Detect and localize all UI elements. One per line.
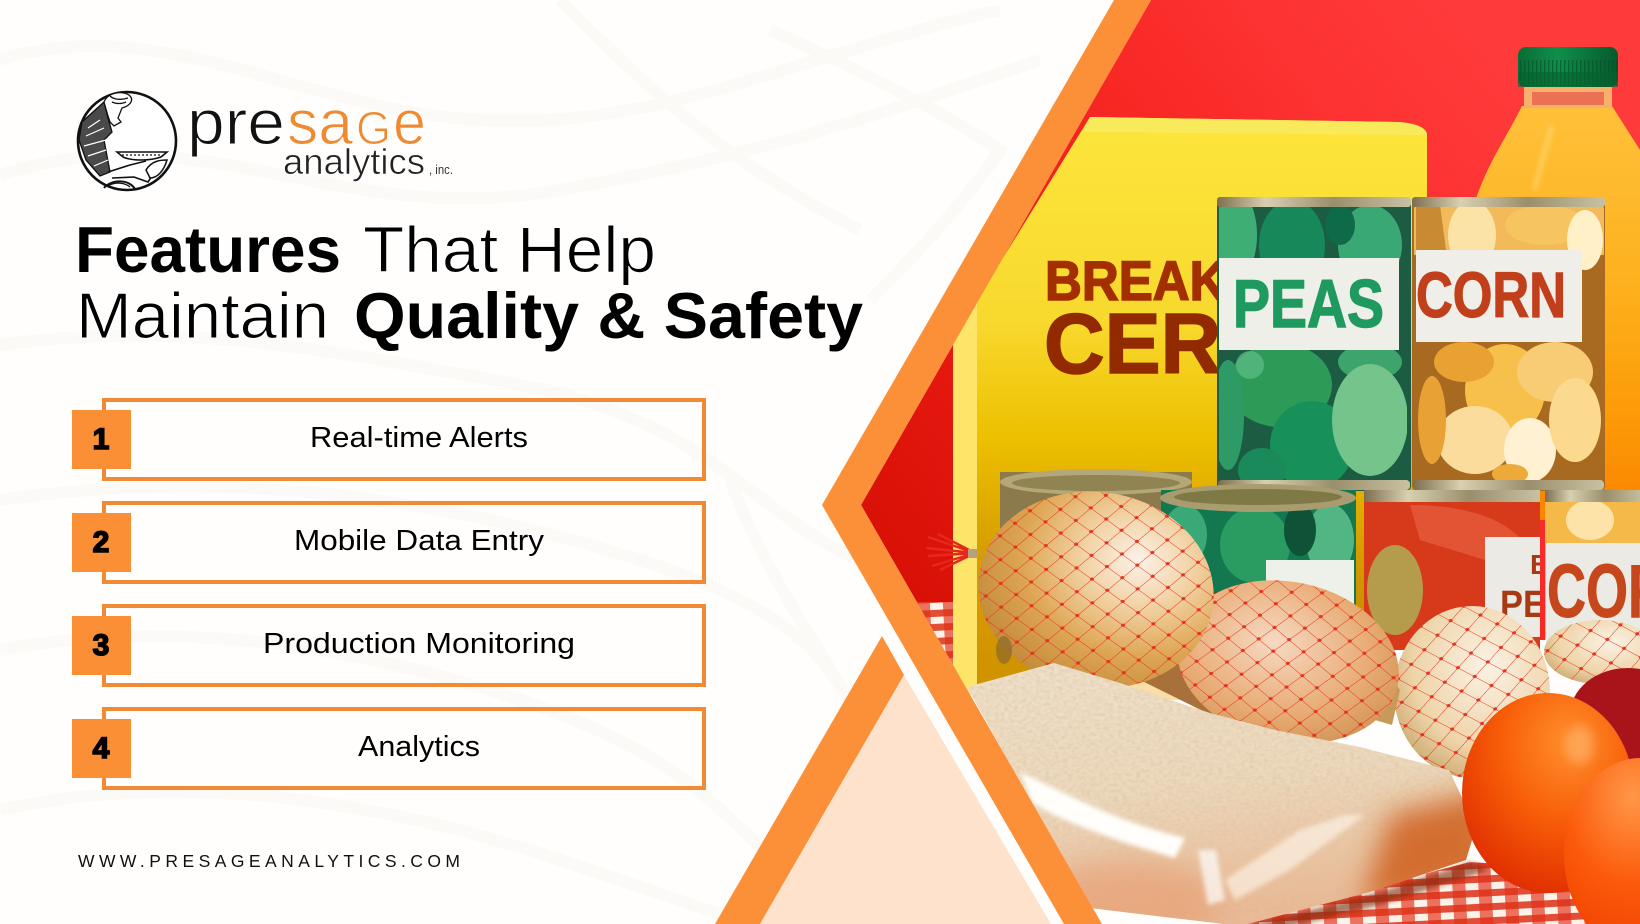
feature item 3: 3 — [93, 629, 109, 662]
wordmark presage — [187, 88, 426, 158]
feature item 3: Production Monitoring — [263, 628, 575, 660]
wordmark analytics: analytics — [283, 141, 425, 182]
yellow cereal box — [953, 117, 1427, 700]
title: That Help — [363, 213, 656, 286]
wordmark presage: G — [356, 102, 391, 154]
wordmark presage: sa — [287, 88, 354, 158]
feature item 1: Real-time Alerts — [310, 422, 528, 454]
peas label text: PEAS — [1233, 266, 1384, 342]
box lettering: BREAKFAST — [1045, 249, 1357, 312]
gingham cloth left — [917, 602, 960, 677]
feature item 1: 1 — [93, 423, 109, 456]
photo: pantry food items — [850, 0, 1640, 924]
red can: PE — [1500, 584, 1546, 626]
green can — [1160, 484, 1356, 606]
feature item 2: Mobile Data Entry — [294, 525, 545, 557]
website url: WWW.PRESAGEANALYTICS.COM — [78, 851, 460, 871]
gingham tablecloth — [1088, 862, 1586, 924]
feature item 2 — [72, 503, 704, 582]
logo — [78, 88, 453, 190]
logo medallion icon — [78, 92, 176, 190]
yellow cereal box: CEREAL — [1044, 297, 1389, 392]
orange chevron band — [822, 0, 1151, 924]
red backdrop — [850, 0, 1640, 640]
feature item 1 — [72, 400, 704, 479]
juice bottle — [1474, 47, 1640, 520]
red can — [1364, 490, 1550, 650]
onions in red net — [966, 477, 1640, 778]
title: Features — [75, 213, 341, 286]
red can label text: B — [1530, 549, 1550, 580]
corner triangle — [715, 636, 1051, 924]
wordmark presage: e — [393, 88, 426, 158]
wordmark inc: , inc. — [429, 162, 453, 177]
lower row of cans — [1000, 469, 1640, 650]
feature item 3 — [72, 606, 704, 685]
corn can front — [1545, 490, 1640, 643]
feature item 4: 4 — [93, 732, 110, 765]
corn label text: CORN — [1416, 259, 1566, 331]
title: Quality & Safety — [354, 279, 863, 352]
feature item 4: Analytics — [358, 731, 480, 763]
feature item 4 — [72, 709, 704, 788]
apple — [1570, 668, 1640, 762]
wordmark presage: pre — [187, 88, 285, 158]
corn can — [1412, 197, 1605, 491]
net tassel — [926, 534, 978, 570]
title: Maintain — [76, 279, 329, 352]
peas can — [1212, 190, 1411, 492]
title — [75, 213, 863, 352]
oranges — [1462, 693, 1640, 924]
feature item 2: 2 — [93, 526, 109, 559]
rice bag — [960, 655, 1490, 924]
